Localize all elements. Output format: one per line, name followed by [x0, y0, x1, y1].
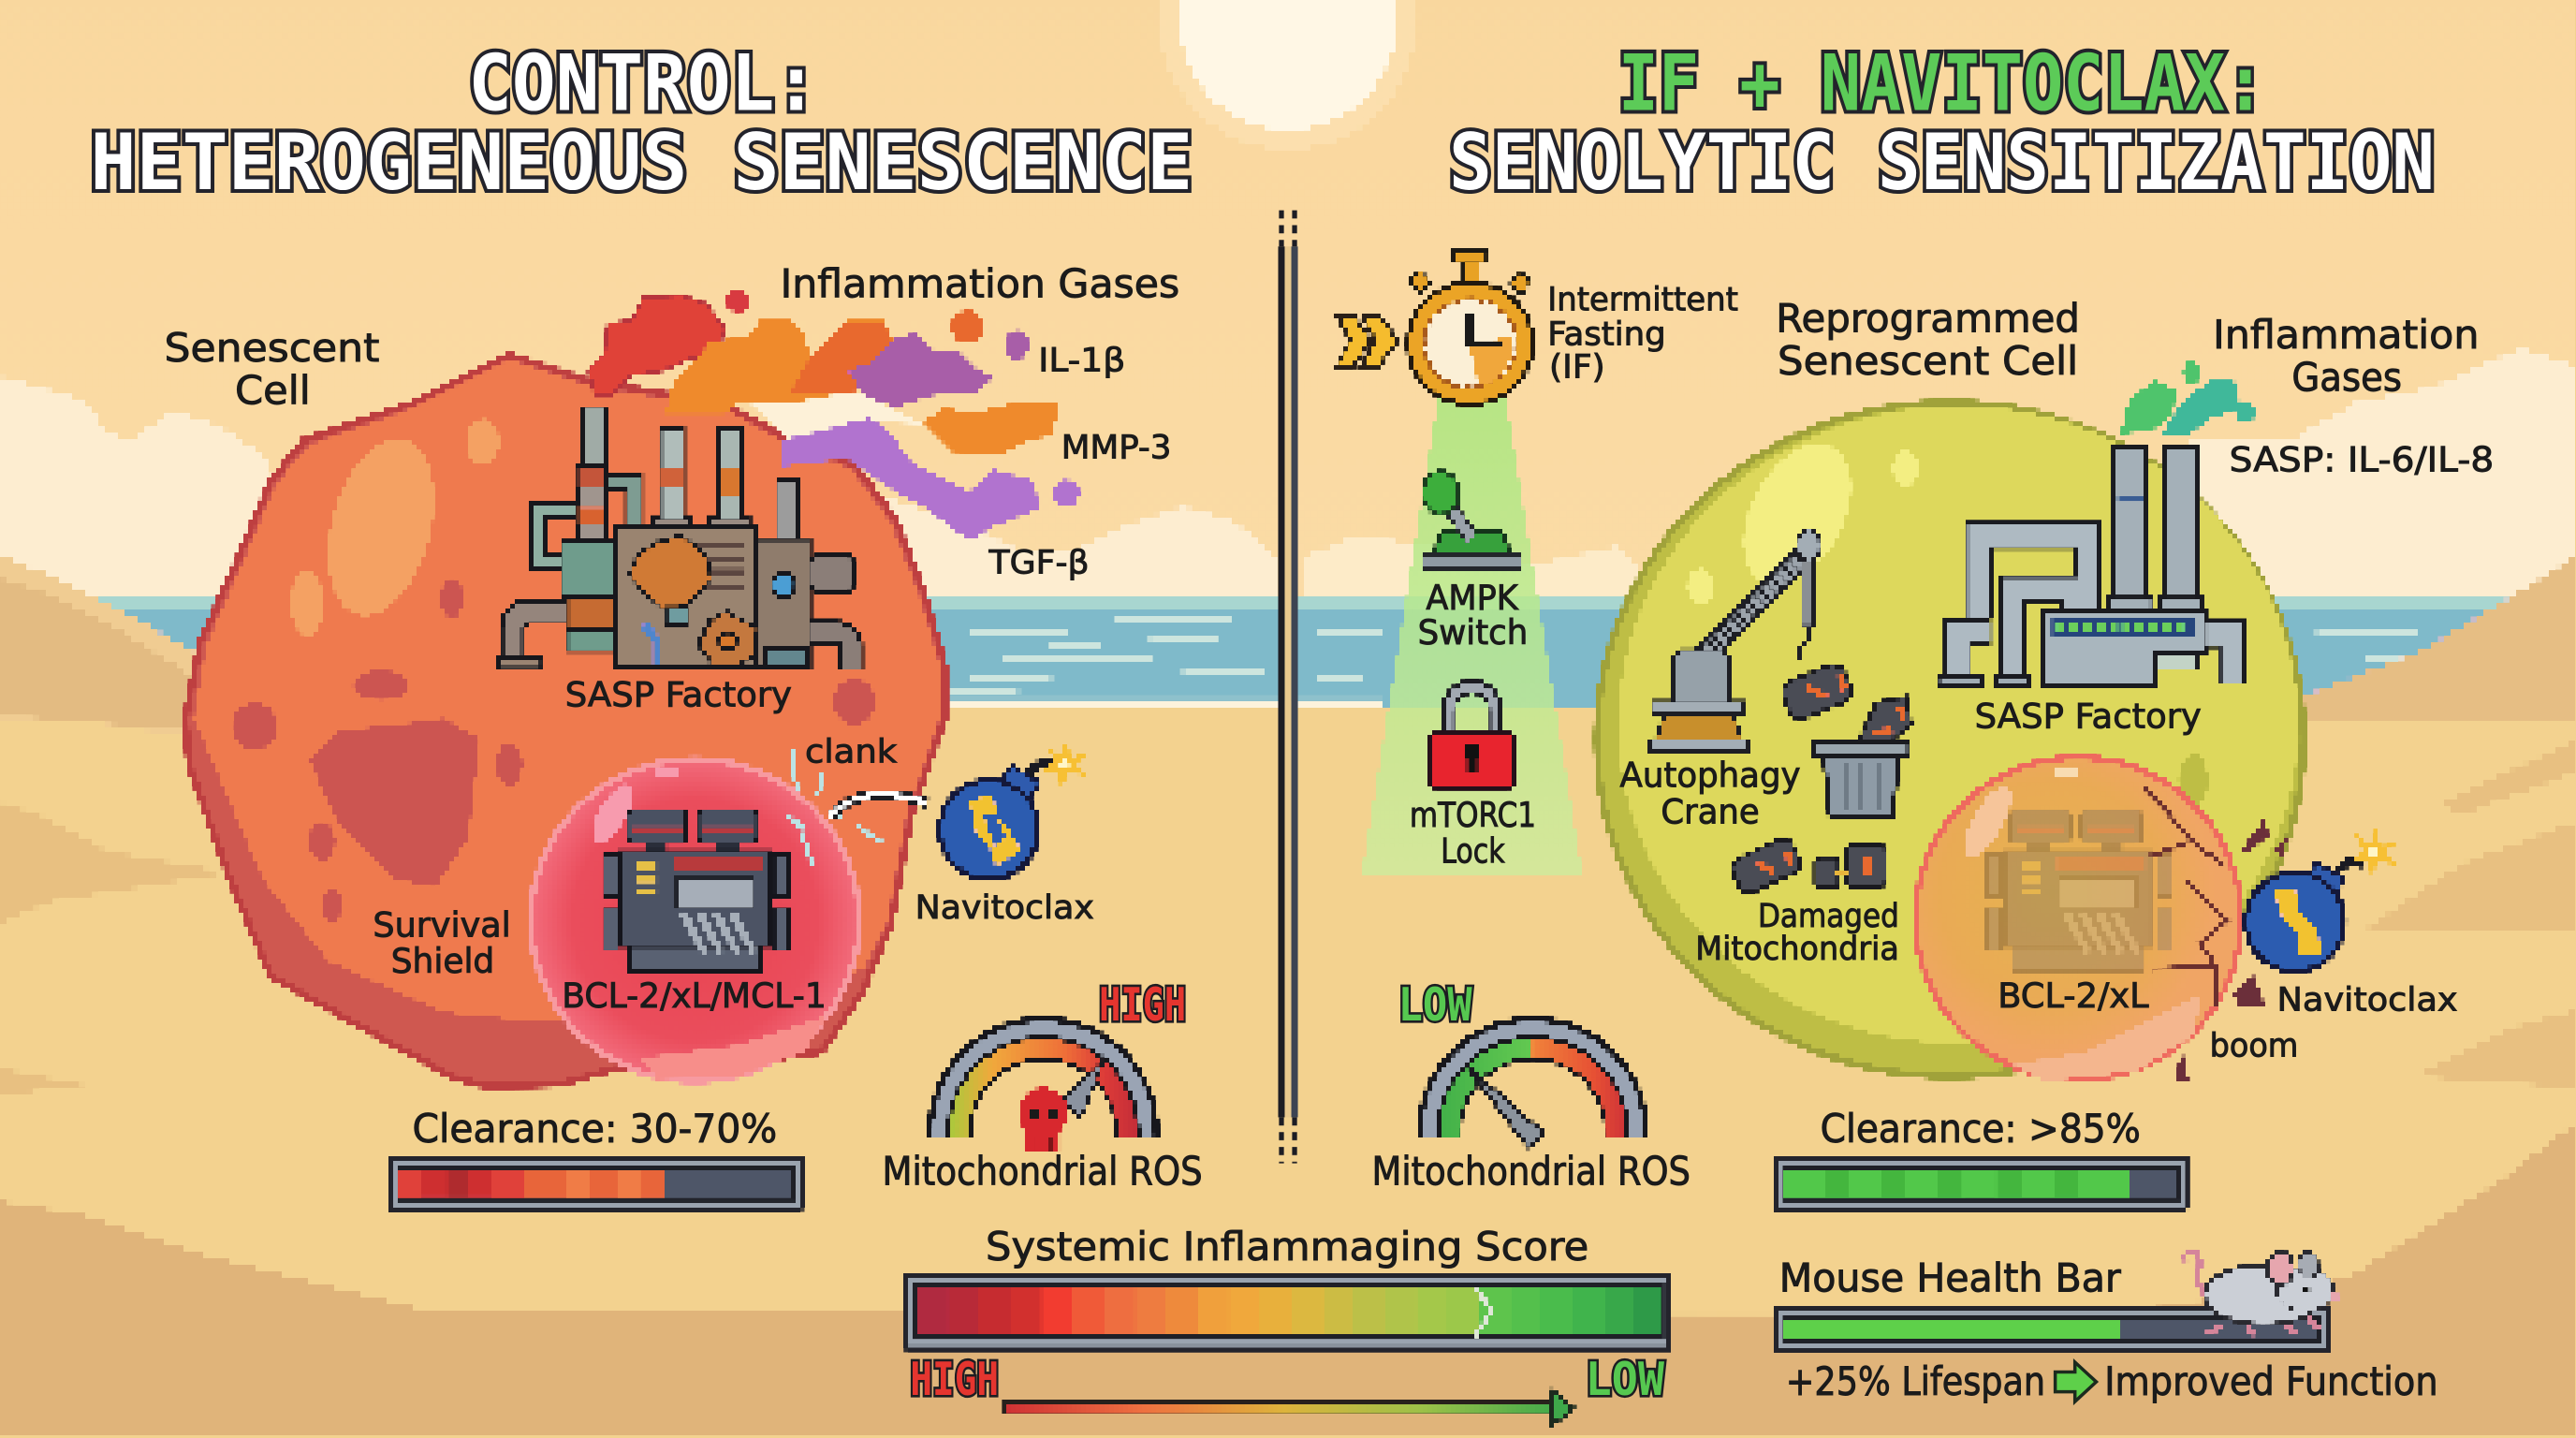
icon: trash can with mitochondrion — [1814, 697, 1910, 816]
label: autophagy crane — [1620, 756, 1801, 831]
panel: IF + navitoclax — [1338, 250, 2494, 1211]
label: clank: clank — [805, 732, 898, 770]
title: control: HETEROGENEOUS SENESCENCE — [91, 118, 1193, 208]
clearance bar 30-70% — [388, 1155, 803, 1211]
inflammation gases plumes — [588, 289, 1079, 540]
label: autophagy crane: Autophagy — [1620, 756, 1801, 796]
label: navitoclax: Navitoclax — [915, 888, 1094, 927]
label: intermittent fasting: (IF) — [1549, 348, 1605, 387]
heading: systemic inflammaging score: Systemic Inflammaging Score — [986, 1224, 1588, 1269]
label: HIGH gauge: HIGH — [1099, 977, 1186, 1032]
clean SASP factory — [1939, 447, 2231, 687]
icon: mTORC1 padlock — [1431, 687, 1513, 787]
autophagy crane with damaged mitochondrion — [1649, 529, 1855, 751]
label: intermittent fasting — [1547, 281, 1738, 387]
label: inflammation gases: Inflammation Gases — [781, 261, 1179, 307]
icon: green arrow — [2056, 1362, 2097, 1401]
label: inflammation gases — [2213, 312, 2479, 401]
health bar — [1773, 1306, 2330, 1352]
clearance bar >85% — [1773, 1155, 2188, 1211]
label: survival: Survival — [373, 904, 511, 945]
label: LOW gauge: LOW — [1398, 977, 1472, 1032]
senescent cell body — [185, 355, 944, 1086]
heading: mouse health bar: Mouse Health Bar — [1779, 1255, 2121, 1301]
label: navitoclax: Navitoclax — [2277, 980, 2458, 1019]
label: AMPK switch: Switch — [1418, 612, 1528, 653]
reprogrammed senescent cell body — [1597, 403, 2304, 1077]
label: BCL-2/xL/MCL-1: BCL-2/xL/MCL-1 — [562, 976, 827, 1016]
title: control — [91, 39, 1193, 208]
label: damaged mitochondria: Damaged — [1758, 897, 1899, 935]
green SASP gas plumes — [2121, 361, 2256, 437]
label: inflammation gases: Gases — [2291, 355, 2402, 401]
label: mTORC1 lock — [1410, 795, 1536, 871]
label: IL-1 beta: IL-1β — [1038, 342, 1125, 380]
divider between panels — [1278, 211, 1298, 1164]
label: reprogrammed senescent cell — [1776, 296, 2080, 384]
label: BCL-2/xL: BCL-2/xL — [1998, 976, 2149, 1016]
label: clearance >85%: Clearance: >85% — [1821, 1106, 2141, 1152]
label: AMPK switch: AMPK — [1426, 578, 1519, 618]
survival shield bubble with BCL-2 engine — [531, 751, 929, 1081]
SASP factory — [498, 407, 855, 668]
icon: navitoclax bomb — [940, 741, 1090, 879]
mouse health panel — [1773, 1251, 2438, 1404]
label: SASP factory: SASP Factory — [565, 675, 792, 715]
label: reprogrammed senescent cell: Senescent Cell — [1778, 338, 2078, 384]
icon: mouse — [2185, 1251, 2339, 1336]
label: shield: Shield — [391, 941, 494, 981]
label: SASP IL-6/IL-8: SASP: IL-6/IL-8 — [2230, 440, 2494, 480]
label: intermittent fasting: Intermittent — [1547, 281, 1738, 319]
gauge: mitochondrial ROS high — [940, 1029, 1147, 1151]
debris fragments — [2175, 820, 2287, 1081]
clank impact sparks — [785, 751, 929, 864]
label: LOW: LOW — [1586, 1352, 1664, 1406]
label: HIGH: HIGH — [910, 1352, 999, 1406]
label: mitochondrial ROS: Mitochondrial ROS — [1372, 1148, 1690, 1194]
label: SASP factory: SASP Factory — [1975, 697, 2202, 737]
icon: AMPK switch lever — [1423, 472, 1521, 568]
panel: control — [165, 261, 1203, 1211]
label: reprogrammed senescent cell: Reprogrammed — [1776, 296, 2080, 342]
gauge: mitochondrial ROS low — [1429, 1029, 1636, 1147]
icon: damaged mitochondria — [1729, 836, 1886, 896]
label: damaged mitochondria — [1695, 897, 1899, 968]
label: MMP-3: MMP-3 — [1061, 429, 1171, 467]
icon: navitoclax bomb — [2246, 829, 2398, 971]
label: clearance 30-70%: Clearance: 30-70% — [413, 1106, 777, 1152]
label: inflammation gases: Inflammation — [2213, 312, 2479, 358]
text: lifespan: +25% Lifespan — [1786, 1358, 2045, 1404]
gradient arrow high to low — [1003, 1390, 1573, 1426]
label: mTORC1 lock: Lock — [1441, 830, 1505, 871]
label: boom: boom — [2210, 1027, 2298, 1065]
fasting light beam — [1362, 394, 1582, 874]
label: mitochondrial ROS: Mitochondrial ROS — [882, 1148, 1203, 1194]
label: autophagy crane: Crane — [1661, 791, 1760, 831]
label: senescent cell: Senescent — [165, 325, 379, 371]
title: control: CONTROL: — [468, 39, 818, 129]
label: damaged mitochondria: Mitochondria — [1695, 930, 1899, 968]
label: intermittent fasting: Fasting — [1547, 315, 1666, 354]
title: IF + navitoclax: SENOLYTIC SENSITIZATION — [1449, 118, 2435, 208]
label: TGF-beta: TGF-β — [988, 544, 1090, 582]
label: mTORC1 lock: mTORC1 — [1410, 795, 1536, 835]
score bar — [903, 1273, 1673, 1351]
text: improved function: Improved Function — [2104, 1358, 2438, 1404]
label: cell: Cell — [235, 368, 311, 414]
label: AMPK switch — [1418, 578, 1528, 653]
title: IF + navitoclax — [1449, 39, 2435, 208]
icon: intermittent fasting stopwatch — [1338, 250, 1533, 404]
cracked survival shield with faded engine — [1915, 757, 2241, 1081]
systemic inflammaging score — [903, 1224, 1673, 1426]
title: IF + navitoclax: IF + NAVITOCLAX: — [1618, 39, 2265, 129]
